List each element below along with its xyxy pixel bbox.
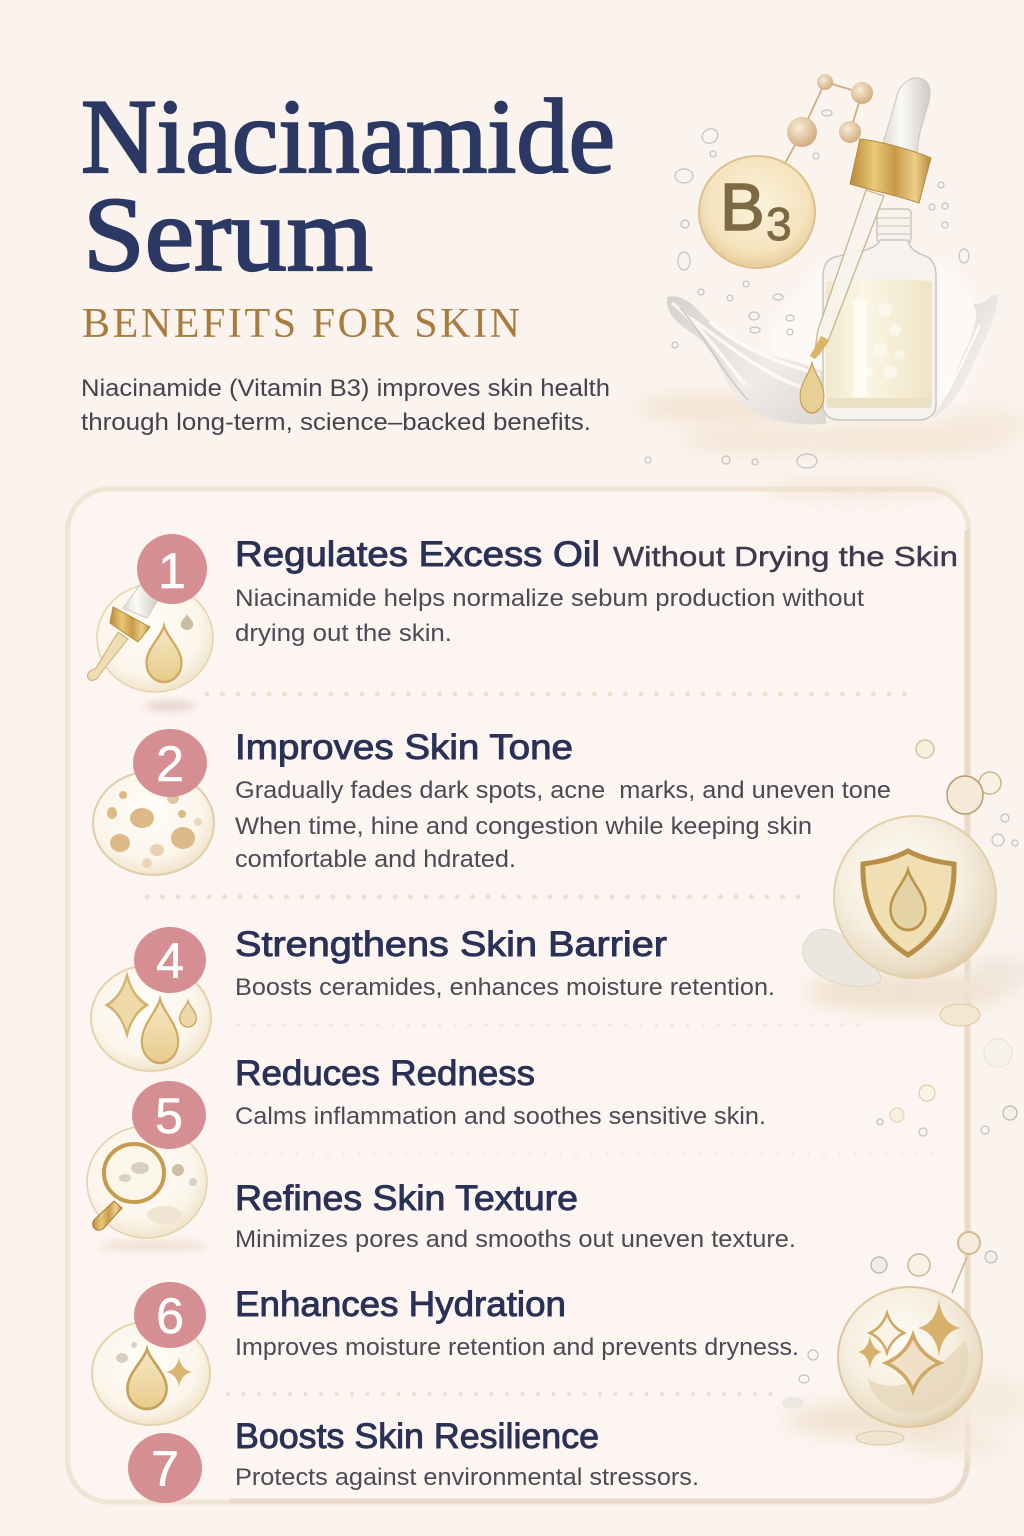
panel: benefits card [68, 489, 968, 1502]
surface stain [785, 1374, 1024, 1455]
description: Niacinamide helps normalize sebum production without [235, 585, 864, 612]
heading [235, 535, 958, 574]
divider [235, 1152, 945, 1156]
sparkles [858, 1300, 960, 1391]
surface stain [635, 396, 1024, 496]
item 1: regulates excess oil [88, 534, 958, 711]
illustration: shield pearl [802, 740, 1024, 1026]
number badge 6: 6 [156, 1288, 184, 1344]
pearl [838, 1287, 982, 1427]
item 6: enhances hydration [92, 1282, 799, 1425]
description: Protects against environmental stressors. [235, 1464, 699, 1491]
description: comfortable and hdrated. [235, 846, 516, 873]
divider [147, 894, 805, 900]
heading: Reduces Redness [235, 1054, 535, 1093]
heading: Refines Skin Texture [235, 1179, 578, 1218]
icon: magnifying glass [87, 1126, 208, 1251]
intro text [81, 375, 610, 436]
description [235, 777, 891, 873]
divider [207, 692, 915, 696]
lower sediment [868, 1340, 969, 1413]
bottle [823, 209, 936, 420]
heading: Strengthens Skin Barrier [235, 925, 667, 964]
subtitle: BENEFITS FOR SKIN [82, 301, 520, 347]
intro text: through long-term, science–backed benefits. [81, 409, 591, 436]
icon: sparkle and drops [91, 965, 211, 1071]
number badge 1: 1 [158, 543, 186, 599]
decorative bubbles: mid right [877, 1039, 1017, 1136]
description: drying out the skin. [235, 620, 452, 647]
intro text: Niacinamide (Vitamin B3) improves skin health [81, 375, 610, 402]
title: Serum [83, 176, 373, 293]
shield [863, 851, 954, 955]
number badge 7 [128, 1433, 202, 1503]
number badge 4: 4 [156, 933, 184, 989]
heading: Regulates Excess Oil [235, 535, 600, 574]
number badge 6 [134, 1282, 206, 1348]
bubbles [916, 740, 1018, 1026]
number badge 2: 2 [156, 736, 184, 792]
description: Boosts ceramides, enhances moisture retention. [235, 974, 775, 1001]
number badge 7: 7 [151, 1441, 179, 1497]
item 4: reduces redness [87, 1054, 766, 1251]
right panel border accent [230, 530, 967, 1501]
B3 bubble: 3 [766, 198, 792, 250]
description: Minimizes pores and smooths out uneven texture. [235, 1226, 796, 1253]
number badge 5 [132, 1081, 206, 1149]
icon: dark spots [93, 771, 214, 875]
pearl [834, 816, 996, 978]
description [235, 585, 864, 647]
title: Niacinamide [81, 78, 615, 195]
description: Improves moisture retention and prevents dryness. [235, 1334, 799, 1361]
water splash [667, 260, 998, 424]
heading: Without Drying the Skin [613, 541, 958, 572]
number badge 2 [133, 729, 207, 797]
description: Calms inflammation and soothes sensitive skin. [235, 1103, 766, 1130]
icon: dropper and oil drop [88, 584, 213, 711]
title [81, 78, 615, 293]
heading: Improves Skin Tone [235, 728, 573, 767]
heading: Boosts Skin Resilience [235, 1417, 599, 1456]
description: Gradually fades dark spots, acne marks, and uneven tone [235, 777, 891, 804]
surface stain [805, 957, 1024, 1012]
illustration: serum bottle with B3 [635, 74, 1024, 496]
dropper [800, 78, 931, 413]
molecule [783, 74, 873, 167]
bubbles [782, 1232, 997, 1409]
number badge 1 [137, 534, 207, 604]
item 7: boosts skin resilience [128, 1417, 699, 1503]
divider [228, 1392, 780, 1396]
number badge 4 [134, 927, 206, 993]
description: When time, hine and congestion while keeping skin [235, 813, 812, 840]
item 2: improves skin tone [93, 728, 891, 875]
item 5: refines skin texture [235, 1179, 796, 1253]
water swoosh [802, 929, 881, 987]
item 3: strengthens skin barrier [91, 925, 775, 1071]
illustration: sparkle pearl [782, 1232, 1024, 1455]
number badge 5: 5 [155, 1088, 183, 1144]
droplets [645, 110, 969, 468]
heading: Enhances Hydration [235, 1285, 566, 1324]
icon: drop and sparkle [92, 1321, 210, 1425]
B3 bubble: B [720, 170, 765, 245]
B3 bubble [699, 156, 815, 268]
divider [238, 1023, 870, 1027]
